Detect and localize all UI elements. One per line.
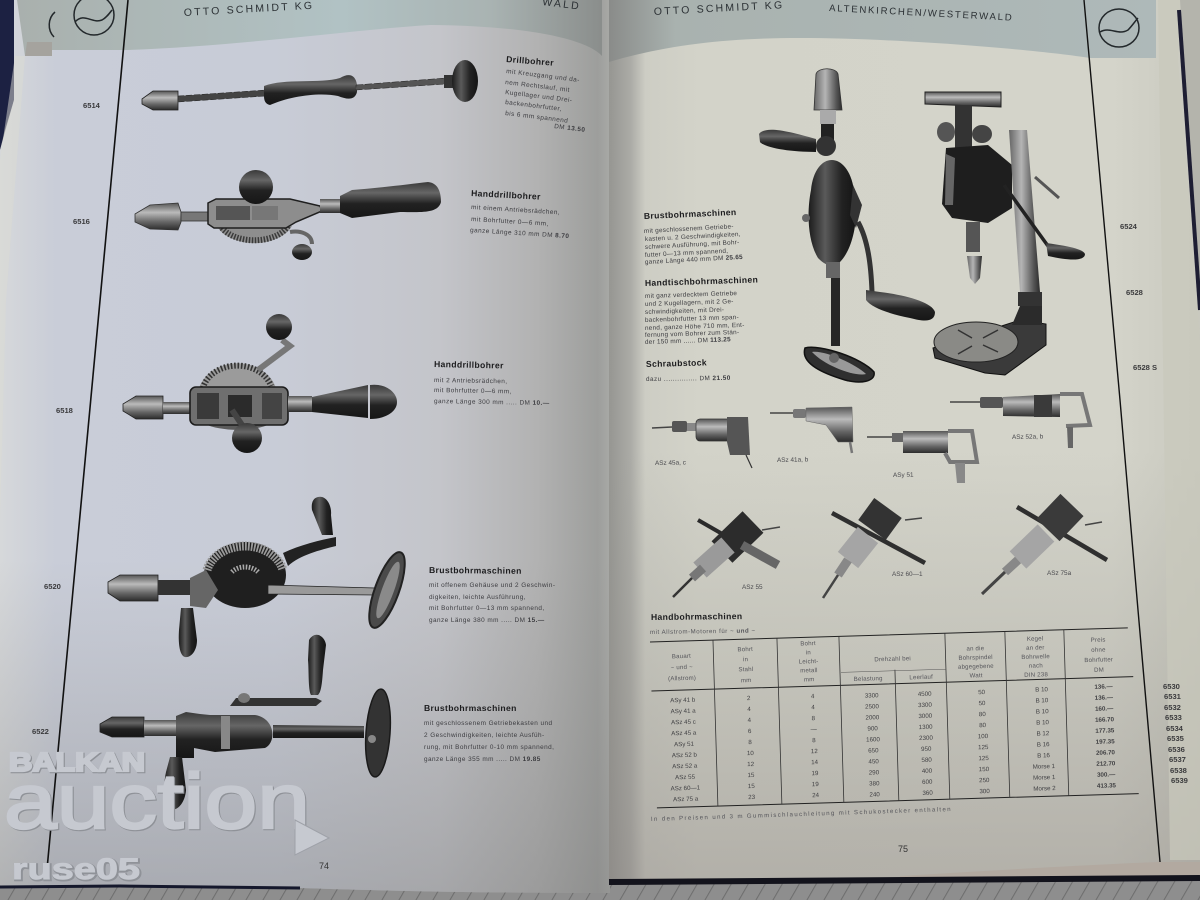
text: Handdrillbohrer 6516: ganze Länge 310 mm DM 8.70 [470,227,570,240]
table: Handbohrmaschinen specifications: B 10 [1036,708,1049,716]
table: Handbohrmaschinen specifications: 19 [812,781,819,788]
text: Handdrillbohrer 6518 [434,359,550,407]
table: Handbohrmaschinen specifications: 600 [922,779,933,786]
table: Handbohrmaschinen specifications: 3300 [918,702,933,709]
text: Brustbohrmaschinen 6522: mit geschlossenem Getriebekasten und [424,720,552,727]
table: Handbohrmaschinen specifications: 24 [812,792,820,799]
label ASz 75 a: ASz 75a [1047,570,1072,577]
table: Handbohrmaschinen specifications: metall [800,667,818,675]
catalog numbers 6530–6539 [1163,682,1188,785]
tool: electric drill ASz 52 a, b [950,394,1090,448]
table: Handbohrmaschinen specifications: Stahl [738,666,753,673]
text: Brustbohrmaschinen 6522: Brustbohrmaschinen [424,703,517,713]
table: Handbohrmaschinen specifications: 100 [978,733,989,740]
label ASy 51: ASy 51 [893,472,914,479]
text: Brustbohrmaschinen 6520: mit offenem Gehäuse und 2 Geschwin- [429,582,555,589]
text: Handtischbohrmaschinen: schwindigkeiten, mit Drei- [645,307,724,316]
tool: hand drill 6516 [135,170,441,260]
table: Handbohrmaschinen specifications: in [743,656,748,663]
text: Handdrillbohrer 6516: mit Bohrfutter 0—6 mm, [471,216,549,228]
catalog numbers 6530–6539: 6532 [1164,703,1181,712]
table: Handbohrmaschinen specifications: Bohrt [800,640,816,648]
table: Handbohrmaschinen specifications: abgegebene [958,663,994,671]
table: Handbohrmaschinen specifications: DM [1094,667,1104,674]
catalog number 6522: 6522 [32,727,49,736]
table: Handbohrmaschinen specifications: (Allstrom) [668,675,696,682]
text: Handdrillbohrer 6516 [470,188,570,240]
table: Handbohrmaschinen specifications: 2000 [865,714,880,722]
table: Handbohrmaschinen specifications: ~ und ~ [671,664,693,671]
table: Handbohrmaschinen specifications: 80 [979,722,987,729]
text: Brustbohrmaschinen 6522: rung, mit Bohrfutter 0-10 mm spannend, [424,744,554,751]
tool: breast drill 6524 [759,69,935,382]
text: Drillbohrer: backenbohrfutter, [505,99,562,113]
table: Handbohrmaschinen specifications: 580 [921,757,932,764]
table: Handbohrmaschinen specifications: 1600 [866,736,881,744]
table: Handbohrmaschinen specifications: Morse 1 [1033,763,1056,771]
table: Handbohrmaschinen specifications: B 12 [1036,730,1050,738]
table: Handbohrmaschinen specifications: 50 [978,689,986,696]
header: OTTO SCHMIDT KG: OTTO SCHMIDT KG [183,0,315,19]
text: Handtischbohrmaschinen: Handtischbohrmaschinen [645,274,758,288]
vertical margin rule left [46,0,128,880]
table: Handbohrmaschinen specifications: 650 [868,747,879,755]
table: Handbohrmaschinen specifications: 300.— [1097,771,1116,779]
table: Handbohrmaschinen specifications: 136.— [1094,683,1114,691]
tool: electric drill ASz 75 a [982,505,1107,594]
text: Drillbohrer: DM 13.50 [554,123,586,134]
vertical margin rule right [1084,0,1160,862]
text: Brustbohrmaschinen 6520 [429,565,555,624]
table: Handbohrmaschinen specifications: 2300 [919,735,934,742]
book bottom edge [0,878,1200,888]
watermark: Balkan auction ruse05 [4,747,329,887]
catalog numbers 6530–6539: 6536 [1168,745,1185,754]
text: Brustbohrmaschinen: ganze Länge 440 mm DM 25.65 [645,254,743,266]
catalog numbers 6530–6539: 6535 [1167,734,1185,743]
watermark: Balkan auction ruse05: ruse05 [13,854,141,887]
tool: electric drill ASz 41 a, b [770,407,853,453]
panel: right page (75) [609,0,1200,884]
catalog numbers 6530–6539: 6531 [1164,692,1182,701]
logo: left page [49,0,114,37]
table: Handbohrmaschinen specifications: 400 [922,768,933,775]
text: Handtischbohrmaschinen: der 150 mm ...... DM 113.25 [645,336,731,346]
tool: breast drill 6522 [100,635,393,810]
catalog numbers 6530–6539: 6533 [1165,713,1182,722]
label ASz 55: ASz 55 [742,584,763,591]
tool: hand drill 6518 [123,314,397,453]
text: Handtischbohrmaschinen: backenbohrfutter 13 mm span- [645,314,739,324]
table: Handbohrmaschinen specifications: 6 [748,728,752,735]
table: Handbohrmaschinen specifications: DIN 238 [1024,671,1049,679]
table: Handbohrmaschinen specifications [650,628,1139,808]
text: Handtischbohrmaschinen: mit ganz verdecktem Getriebe [645,290,737,300]
table: Handbohrmaschinen specifications: nach [1029,662,1043,670]
text: Handdrillbohrer 6516: Handdrillbohrer [471,188,541,202]
text: Drillbohrer: Kugellager und Drei- [505,89,573,104]
text: Handtischbohrmaschinen: fernung vom Bohrer zum Stän- [645,329,739,339]
table: Handbohrmaschinen specifications: Preis [1091,636,1106,644]
catalog number 6528 S: 6528 S [1133,363,1157,372]
watermark: Balkan auction ruse05: ruse05 [12,853,140,886]
text: Schraubstock: Schraubstock [646,357,707,369]
catalog number 6518: 6518 [56,406,73,415]
catalog number 6528: 6528 [1126,288,1143,297]
table: Handbohrmaschinen specifications: ASz 52 b [672,752,698,759]
table: Handbohrmaschinen specifications: B 10 [1035,697,1049,705]
table: Handbohrmaschinen specifications: 10 [747,750,754,757]
tool: electric drill ASz 55 [673,520,780,597]
table: Handbohrmaschinen specifications: 8 [812,715,816,722]
text: Handdrillbohrer 6518: mit Bohrfutter 0—6 mm, [434,387,512,395]
table: Handbohrmaschinen specifications: Bohrt [737,646,753,653]
table: Handbohrmaschinen specifications: 15 [748,783,755,790]
table: Handbohrmaschinen specifications: ASy 41 b [670,697,696,704]
label ASz 60—1: ASz 60—1 [892,571,923,578]
text: Handdrillbohrer 6516: mit einem Antriebsrädchen, [471,204,560,216]
tool: electric drill ASz 45 a, c [652,417,752,468]
table: Handbohrmaschinen specifications: 150 [979,766,990,773]
text: Brustbohrmaschinen: mit geschlossenem Getriebe- [644,223,734,235]
table: Handbohrmaschinen specifications: mm [804,676,815,683]
table: Handbohrmaschinen specifications: an der [1026,644,1045,652]
table: Handbohrmaschinen specifications: 3000 [918,713,933,720]
watermark: Balkan auction ruse05: BALKAN [10,748,146,778]
text: Brustbohrmaschinen: kasten u. 2 Geschwindigkeiten, [645,231,741,243]
table: Handbohrmaschinen specifications: ohne [1091,646,1106,654]
tool: drill 6514 [142,60,478,110]
text: Handtischbohrmaschinen: und 2 Kugellagern, mit 2 Ge- [645,298,734,308]
table: Handbohrmaschinen specifications: 3300 [865,692,879,700]
table: Handbohrmaschinen specifications: Morse 1 [1033,774,1056,782]
text: Drillbohrer [505,54,586,134]
table: Handbohrmaschinen specifications: ASz 52 a [672,763,698,770]
table: Handbohrmaschinen specifications: 80 [979,711,986,718]
catalog numbers 6530–6539: 6537 [1169,755,1186,764]
table: Handbohrmaschinen specifications: 360 [922,790,933,797]
table: Handbohrmaschinen specifications: — [810,726,818,733]
tool: electric drill ASz 60—1 [823,508,925,598]
table: Handbohrmaschinen specifications: Leerlauf [909,674,933,681]
table: Handbohrmaschinen specifications: 250 [979,777,990,784]
table: Handbohrmaschinen specifications: 177.35 [1095,727,1115,735]
table: Handbohrmaschinen specifications: ASz 75 a [673,796,699,803]
text: Handtischbohrmaschinen [645,274,758,346]
table: Handbohrmaschinen specifications: 300 [979,788,990,795]
page number 74: 74 [319,861,329,871]
table: Handbohrmaschinen specifications: 4500 [918,691,932,698]
table: Handbohrmaschinen specifications: 14 [811,759,819,766]
table: Handbohrmaschinen specifications: Bohrspindel [958,654,993,662]
right page background [609,0,1200,884]
text: table subtitle: mit Allstrom-Motoren für ~ und ~ [650,628,756,636]
watermark: Balkan auction ruse05: auction [4,757,310,845]
table: Handbohrmaschinen specifications: 206.70 [1096,749,1116,757]
catalog numbers 6530–6539: 6530 [1163,682,1180,691]
text: Schraubstock: dazu ............... DM 21.50 [646,375,731,383]
text: Handdrillbohrer 6518: Handdrillbohrer [434,359,504,370]
label ASz 52 a, b: ASz 52a, b [1012,433,1044,441]
table: Handbohrmaschinen specifications: 900 [867,725,878,733]
table: Handbohrmaschinen specifications: 8 [812,737,816,744]
watermark: Balkan auction ruse05: auction [5,758,311,846]
table: Handbohrmaschinen specifications: 125 [978,744,989,751]
catalog numbers 6530–6539: 6539 [1171,776,1188,785]
header: ALTENKIRCHEN/WESTERWALD: ALTENKIRCHEN/WESTERWALD [829,3,1014,24]
text: Brustbohrmaschinen: futter 0—13 mm spannend, [645,248,728,259]
catalog number 6524: 6524 [1120,222,1138,231]
text: Brustbohrmaschinen 6520: mit Bohrfutter 0—13 mm spannend, [429,605,545,612]
text: Brustbohrmaschinen [644,207,743,266]
text: Schraubstock [646,357,731,383]
table: Handbohrmaschinen specifications: Kegel [1027,635,1043,643]
catalog number 6520: 6520 [44,582,61,591]
table: Handbohrmaschinen specifications: 2500 [865,703,880,711]
watermark: Balkan auction ruse05: BALKAN [9,747,145,777]
label ASz 41 a, b: ASz 41a, b [777,456,809,464]
table: Handbohrmaschinen specifications: ASy 41 a [670,708,696,715]
table: Handbohrmaschinen specifications: B 16 [1037,741,1050,749]
table: Handbohrmaschinen specifications: 125 [978,755,989,762]
text: Brustbohrmaschinen 6520: digkeiten, leichte Ausführung, [429,594,526,601]
table: Handbohrmaschinen specifications: in [806,649,811,656]
table: Handbohrmaschinen specifications: 166.70 [1095,716,1115,724]
table: Handbohrmaschinen specifications: 19 [811,770,819,777]
table: Handbohrmaschinen specifications: 950 [921,746,932,753]
table: Handbohrmaschinen specifications: 197.35 [1096,738,1115,746]
table: Handbohrmaschinen specifications: mm [741,677,752,684]
panel: left page (74) [0,0,610,893]
text: Brustbohrmaschinen 6522 [424,703,554,763]
table: Handbohrmaschinen specifications: 23 [748,794,756,801]
table: Handbohrmaschinen specifications: Belastung [854,675,883,683]
heading: Handbohrmaschinen: Handbohrmaschinen [651,611,742,622]
table: Handbohrmaschinen specifications: 136.— [1095,694,1114,702]
table: Handbohrmaschinen specifications: 290 [869,769,880,777]
table: Handbohrmaschinen specifications: 4 [747,706,751,713]
catalog numbers 6530–6539: 6534 [1166,724,1184,733]
table: Handbohrmaschinen specifications: ASz 45 a [671,730,697,737]
table: Handbohrmaschinen specifications: ASy 51 [674,741,695,748]
text: Brustbohrmaschinen 6520: Brustbohrmaschinen [429,565,522,576]
catalog number 6516: 6516 [73,217,90,226]
table: Handbohrmaschinen specifications: 450 [868,758,879,766]
table footnote: In den Preisen und 3 m Gummischlauchleitung mit Schukostecker enthalten [651,806,951,823]
table: Handbohrmaschinen specifications: 8 [748,739,752,746]
text: Handdrillbohrer 6518: ganze Länge 300 mm ..... DM 10.— [434,398,550,407]
text: Drillbohrer: Drillbohrer [506,54,555,68]
table: Handbohrmaschinen specifications: 4 [748,717,752,724]
table: Handbohrmaschinen specifications: 15 [747,772,755,779]
text: Brustbohrmaschinen: Brustbohrmaschinen [644,207,737,221]
text: Brustbohrmaschinen 6522: ganze Länge 355 mm ..... DM 19.85 [424,756,541,763]
table: Handbohrmaschinen specifications: B 10 [1035,686,1049,694]
table: Handbohrmaschinen specifications: 50 [978,700,986,707]
table: Handbohrmaschinen specifications: B 16 [1037,752,1051,760]
left page background [0,0,610,893]
table: Handbohrmaschinen specifications: 380 [869,780,880,788]
table: Handbohrmaschinen specifications: B 10 [1036,719,1050,727]
text: Handdrillbohrer 6518: mit 2 Antriebsrädchen, [434,377,508,385]
table: Handbohrmaschinen specifications: Bauart [672,653,691,660]
table: Handbohrmaschinen specifications: ASz 60—1 [670,785,701,792]
table: Handbohrmaschinen specifications: Morse 2 [1033,785,1056,793]
tool: bench drill 6528 [925,92,1085,375]
label ASz 45 a, c: ASz 45a, c [655,459,687,467]
table: Handbohrmaschinen specifications: Watt [969,672,983,680]
catalog numbers 6530–6539: 6538 [1170,766,1187,775]
text: Drillbohrer: mit Kreuzgang und da- [506,68,580,84]
table: Handbohrmaschinen specifications: Drehzahl bei [874,655,911,663]
table: Handbohrmaschinen specifications: 4 [811,704,815,711]
page number 75: 75 [898,844,908,854]
text: Drillbohrer: bis 6 mm spannend [505,110,569,125]
table: Handbohrmaschinen specifications: Bohrfutter [1084,656,1113,664]
table: Handbohrmaschinen specifications: 413.35 [1097,782,1117,790]
tool: breast drill 6520 [108,497,412,657]
tool: electric drill ASy 51 [867,431,977,483]
table: Handbohrmaschinen specifications: 160.— [1095,705,1114,713]
logo: right page [1099,9,1139,47]
table: Handbohrmaschinen specifications: Bohrwelle [1021,653,1050,661]
table: Handbohrmaschinen specifications: ASz 45 c [671,719,696,726]
table: Handbohrmaschinen specifications: 2 [747,695,751,702]
table: Handbohrmaschinen specifications: 240 [869,791,880,799]
text: Brustbohrmaschinen: schwere Ausführung, mit Bohr- [645,239,740,251]
catalog number 6514: 6514 [83,101,101,110]
table: Handbohrmaschinen specifications: 212.70 [1096,760,1116,768]
right page edge dark line [1179,10,1200,310]
text: Drillbohrer: nem Rechtslauf, mit [505,79,570,94]
table: Handbohrmaschinen specifications: 1300 [919,724,933,731]
text: Brustbohrmaschinen 6522: 2 Geschwindigkeiten, leichte Ausfüh- [424,732,545,739]
text: Handtischbohrmaschinen: nend, ganze Höhe 710 mm, Ent- [645,322,745,332]
table: Handbohrmaschinen specifications: 4 [811,693,815,700]
table: Handbohrmaschinen specifications: 12 [747,761,755,768]
table: Handbohrmaschinen specifications: ASz 55 [675,774,696,781]
table: Handbohrmaschinen specifications: 12 [811,748,818,755]
table: Handbohrmaschinen specifications: Leicht- [799,658,819,666]
text: Brustbohrmaschinen 6520: ganze Länge 380 mm ..... DM 15.— [429,617,545,624]
table: Handbohrmaschinen specifications: an die [966,645,985,653]
